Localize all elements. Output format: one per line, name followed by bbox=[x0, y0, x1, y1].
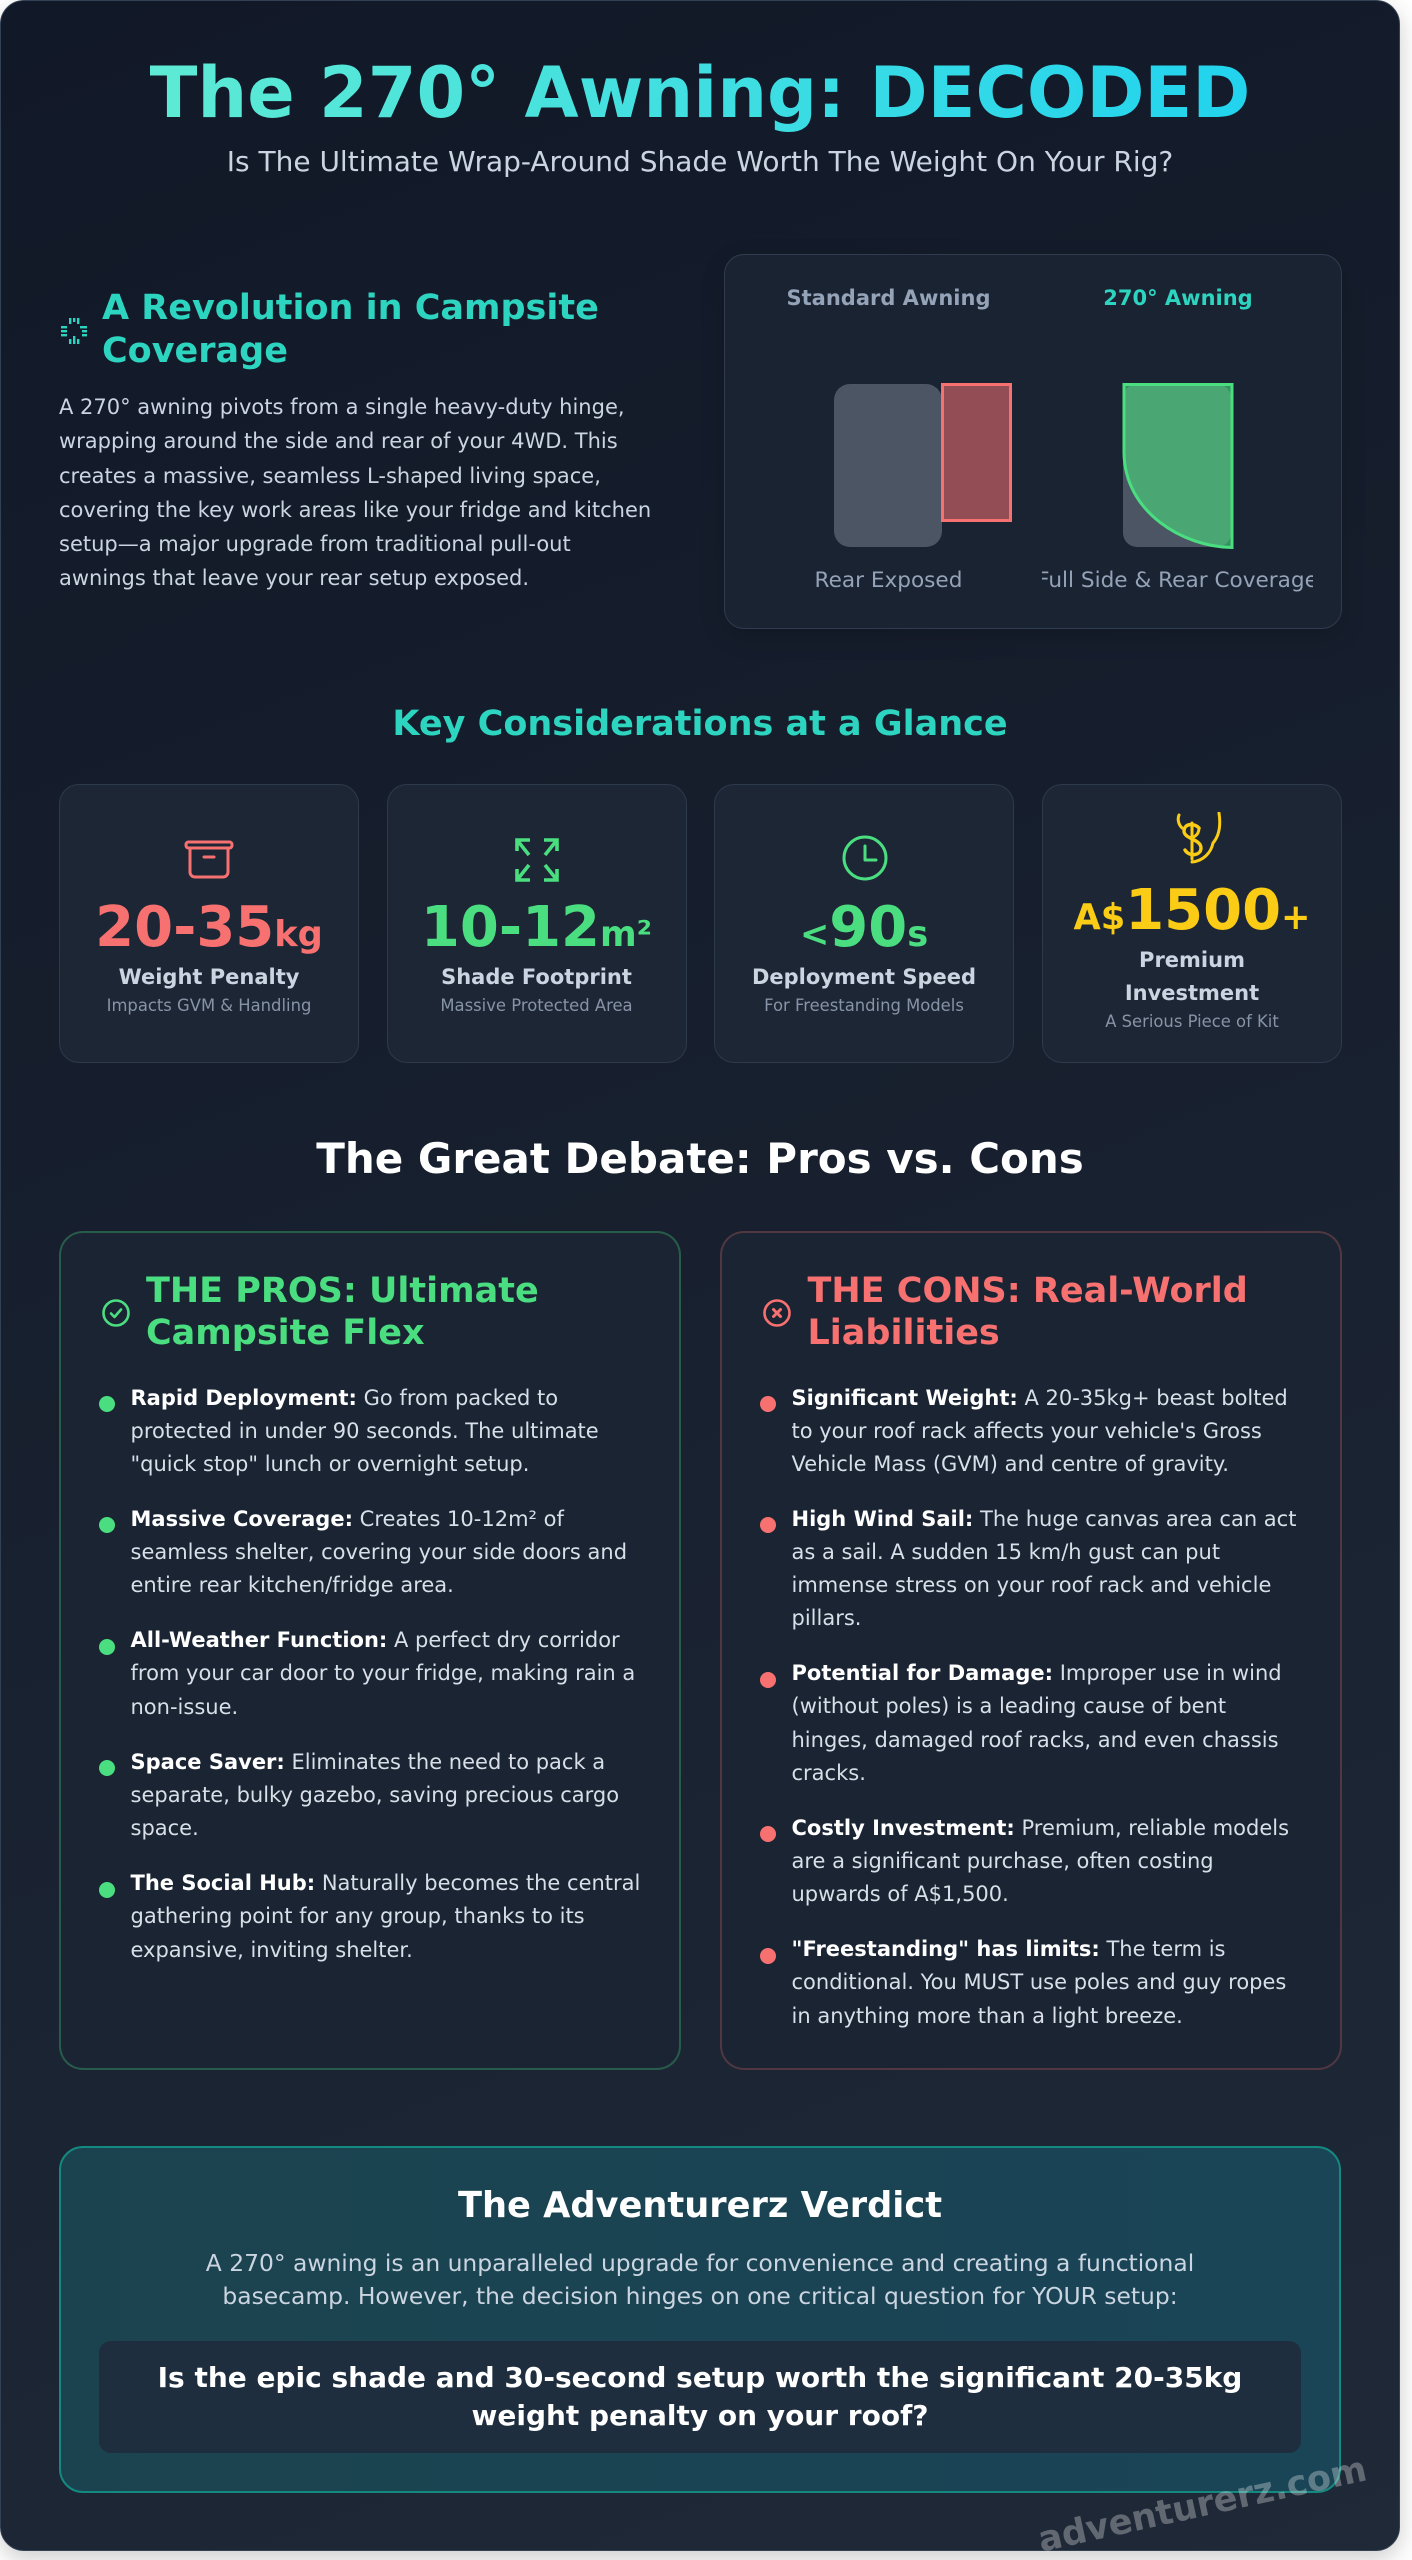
verdict question box bbox=[99, 2341, 1301, 2453]
bullet bbox=[99, 1638, 115, 1654]
text: are a significant purchase, often costing bbox=[792, 1849, 1214, 1873]
text: Space Saver: Eliminates the need to pack a bbox=[130, 1750, 605, 1774]
icon: clock bbox=[842, 836, 888, 880]
text: expansive, inviting shelter. bbox=[130, 1938, 413, 1962]
icon: archive box bbox=[184, 840, 234, 878]
text: Potential for Damage: Improper use in wind bbox=[792, 1661, 1282, 1685]
text: non-issue. bbox=[130, 1695, 238, 1719]
text bbox=[130, 1386, 599, 1476]
watermark: adventurerz.com bbox=[1035, 2450, 1370, 2560]
text: immense stress on your roof rack and vehicle bbox=[792, 1573, 1271, 1597]
bullet bbox=[99, 1882, 115, 1898]
heading: Campsite Flex bbox=[146, 1312, 425, 1352]
text: pillars. bbox=[792, 1606, 861, 1630]
heading bbox=[146, 1270, 539, 1352]
value: 10-12m² bbox=[421, 895, 652, 960]
intro paragraph: wrapping around the side and rear of your 4WD. This bbox=[59, 429, 618, 453]
bullet bbox=[760, 1517, 776, 1533]
pro: space saver bbox=[99, 1750, 619, 1840]
bullet bbox=[760, 1672, 776, 1688]
heading: Liabilities bbox=[808, 1312, 1000, 1352]
stat card: premium investment bbox=[1042, 784, 1342, 1063]
heading bbox=[808, 1270, 1248, 1352]
label: Premium bbox=[1139, 948, 1245, 972]
panel: verdict bbox=[59, 2146, 1341, 2493]
text: from your car door to your fridge, making rain a bbox=[130, 1661, 635, 1685]
text: upwards of A$1,500. bbox=[792, 1882, 1009, 1906]
label: Weight Penalty bbox=[119, 965, 299, 989]
title: The 270° Awning: DECODED bbox=[150, 52, 1250, 134]
intro paragraph: awnings that leave your rear setup exposed. bbox=[59, 566, 529, 590]
text: cracks. bbox=[792, 1761, 866, 1785]
intro paragraph: creates a massive, seamless L-shaped living space, bbox=[59, 464, 601, 488]
text bbox=[792, 1386, 1288, 1476]
text: Significant Weight: A 20-35kg+ beast bolted bbox=[792, 1386, 1288, 1410]
text: separate, bulky gazebo, saving precious cargo bbox=[130, 1783, 619, 1807]
verdict text: A 270° awning is an unparalleled upgrade for convenience and creating a functional bbox=[206, 2249, 1194, 2277]
value: <90s bbox=[800, 895, 928, 960]
pro: rapid deployment bbox=[99, 1386, 599, 1476]
intro paragraph: A 270° awning pivots from a single heavy-duty hinge, bbox=[59, 395, 625, 419]
intro paragraph: covering the key work areas like your fridge and kitchen bbox=[59, 498, 651, 522]
heading: A Revolution in Campsite Coverage: Coverage bbox=[102, 331, 288, 371]
icon: check circle bbox=[102, 1299, 130, 1327]
heading: THE CONS: Real-World bbox=[808, 1270, 1248, 1310]
value: A$1500+ bbox=[1073, 878, 1311, 943]
bullet bbox=[760, 1948, 776, 1964]
diagram: 270 awning bbox=[1122, 383, 1234, 549]
text bbox=[792, 1937, 1286, 2028]
con: costly investment bbox=[760, 1816, 1289, 1906]
icon: coverage dashes bbox=[61, 318, 87, 344]
panel: pros bbox=[59, 1231, 681, 2070]
text: "Freestanding" has limits: The term is bbox=[792, 1937, 1226, 1961]
label: Deployment Speed bbox=[752, 965, 976, 989]
text: conditional. You MUST use poles and guy ropes bbox=[792, 1970, 1286, 1994]
text: space. bbox=[130, 1816, 199, 1840]
text: Vehicle Mass (GVM) and centre of gravity. bbox=[792, 1452, 1229, 1476]
stat card: deployment speed bbox=[714, 784, 1014, 1063]
con: significant weight bbox=[760, 1386, 1288, 1476]
con: potential for damage bbox=[760, 1661, 1282, 1785]
text bbox=[130, 1628, 635, 1719]
text: to your roof rack affects your vehicle's Gross bbox=[792, 1419, 1262, 1443]
intro paragraph: setup—a major upgrade from traditional pull-out bbox=[59, 532, 571, 556]
diagram: standard awning bbox=[834, 383, 1012, 547]
question text: weight penalty on your roof? bbox=[471, 2398, 928, 2432]
text: (without poles) is a leading cause of bent bbox=[792, 1694, 1226, 1718]
heading: The Great Debate: The Great Debate: Pros vs. Cons bbox=[316, 1134, 1084, 1183]
subtitle: Is The Ultimate Wrap-Around Shade Worth The Weight On Your Rig? bbox=[227, 144, 1173, 178]
note: Impacts GVM & Handling bbox=[107, 996, 311, 1015]
text: The Social Hub: Naturally becomes the central bbox=[130, 1871, 640, 1895]
text bbox=[130, 1750, 619, 1840]
caption: Rear Exposed: Rear Exposed bbox=[815, 568, 962, 593]
bullet bbox=[760, 1396, 776, 1412]
heading: A Revolution in Campsite Coverage bbox=[102, 288, 599, 371]
bullet bbox=[99, 1760, 115, 1776]
pro: social hub bbox=[99, 1871, 640, 1962]
con: high wind sail bbox=[760, 1506, 1296, 1630]
heading: Key Considerations: Key Considerations at a Glance bbox=[392, 704, 1008, 744]
label: Shade Footprint bbox=[441, 965, 632, 989]
intro paragraph bbox=[59, 395, 651, 590]
icon: x circle bbox=[763, 1299, 791, 1327]
verdict text bbox=[61, 2247, 1339, 2313]
stat card: weight penalty bbox=[59, 784, 359, 1063]
bullet bbox=[99, 1517, 115, 1533]
text: in anything more than a light breeze. bbox=[792, 2004, 1183, 2028]
icon: dollar sign bbox=[1176, 812, 1222, 864]
label: 270 Awning: 270° Awning bbox=[1103, 286, 1253, 310]
text: Rapid Deployment: Go from packed to bbox=[130, 1386, 558, 1410]
heading: A Revolution in Campsite Coverage: A Revolution in Campsite bbox=[102, 288, 599, 328]
text: seamless shelter, covering your side doors and bbox=[130, 1540, 627, 1564]
note: For Freestanding Models bbox=[764, 996, 964, 1015]
pro: massive coverage bbox=[99, 1506, 627, 1597]
heading: THE PROS: Ultimate bbox=[146, 1270, 539, 1310]
question text bbox=[99, 2359, 1301, 2434]
question text: Is the epic shade and 30-second setup worth the significant 20-35kg bbox=[158, 2361, 1242, 2394]
panel: awning comparison bbox=[724, 254, 1342, 629]
pro: all-weather function bbox=[99, 1628, 635, 1719]
text: gathering point for any group, thanks to its bbox=[130, 1904, 585, 1928]
text: Costly Investment: Premium, reliable models bbox=[792, 1816, 1289, 1840]
note: Massive Protected Area bbox=[440, 996, 633, 1015]
value: 20-35kg bbox=[95, 895, 323, 960]
verdict heading: The Adventurerz Verdict bbox=[458, 2184, 942, 2226]
text bbox=[792, 1816, 1289, 1906]
text bbox=[792, 1506, 1296, 1630]
panel: cons bbox=[720, 1231, 1342, 2070]
label bbox=[1125, 948, 1259, 1005]
text bbox=[130, 1506, 627, 1597]
con: freestanding limits bbox=[760, 1937, 1286, 2028]
text: High Wind Sail: The huge canvas area can act bbox=[792, 1506, 1296, 1530]
label: Investment bbox=[1125, 981, 1259, 1005]
text: "quick stop" lunch or overnight setup. bbox=[130, 1452, 529, 1476]
verdict text: basecamp. However, the decision hinges on one critical question for YOUR setup: bbox=[222, 2282, 1178, 2310]
bullet bbox=[760, 1826, 776, 1842]
text: entire rear kitchen/fridge area. bbox=[130, 1573, 454, 1597]
note: A Serious Piece of Kit bbox=[1105, 1012, 1279, 1031]
label: Standard Awning: Standard Awning bbox=[786, 286, 990, 310]
text: Massive Coverage: Creates 10-12m² of bbox=[130, 1506, 564, 1530]
text: hinges, damaged roof racks, and even chassis bbox=[792, 1728, 1279, 1752]
icon: expand arrows bbox=[515, 838, 559, 882]
bullet bbox=[99, 1396, 115, 1412]
stat card: shade footprint bbox=[386, 784, 686, 1063]
text: All-Weather Function: A perfect dry corridor bbox=[130, 1628, 620, 1652]
text: protected in under 90 seconds. The ultimate bbox=[130, 1419, 599, 1443]
text bbox=[130, 1871, 640, 1962]
text: as a sail. A sudden 15 km/h gust can put bbox=[792, 1540, 1220, 1564]
text bbox=[792, 1661, 1282, 1785]
